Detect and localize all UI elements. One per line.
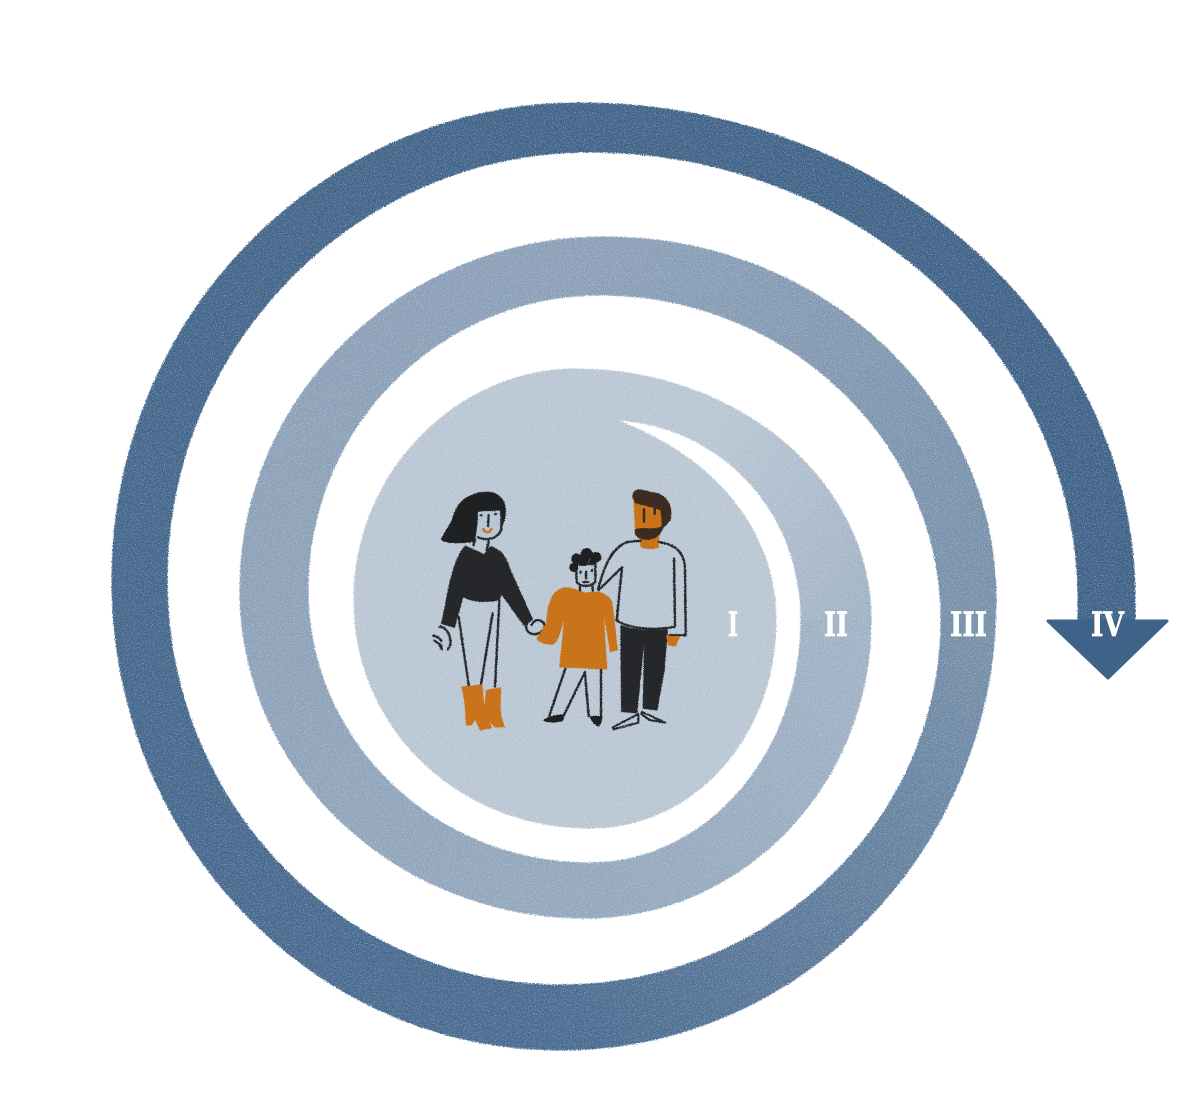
woman — [433, 492, 545, 731]
child legs — [549, 669, 601, 718]
man beard — [634, 525, 663, 540]
child hair — [569, 548, 601, 572]
man trousers — [620, 625, 668, 713]
woman smile — [483, 529, 491, 532]
man hand — [666, 636, 680, 647]
man — [598, 489, 686, 729]
man face — [633, 501, 662, 529]
man sweater — [598, 541, 686, 635]
child head — [576, 563, 595, 586]
label I: I — [728, 605, 738, 645]
stage II band, first turn — [240, 369, 871, 918]
clasped hands — [526, 619, 545, 634]
child — [537, 548, 618, 727]
child shoes — [543, 714, 602, 727]
man shoes — [613, 712, 665, 729]
man hair — [632, 489, 671, 530]
woman face — [477, 511, 501, 539]
label IV: IV — [1091, 605, 1124, 645]
woman hair — [441, 492, 506, 543]
woman blouse — [441, 545, 533, 628]
woman hand — [433, 627, 450, 649]
woman trousers — [459, 601, 499, 687]
stage IV band, outer turn — [112, 103, 1135, 1050]
man neck — [640, 537, 659, 549]
label II: II — [824, 605, 848, 645]
stage labels — [728, 605, 1124, 645]
label III: III — [950, 605, 987, 645]
spiral band — [112, 103, 1135, 1050]
stage III band, second turn — [240, 237, 996, 1050]
stage I central blob — [354, 369, 776, 828]
family illustration — [433, 489, 686, 731]
woman boots — [461, 684, 492, 731]
arrowhead — [1048, 621, 1167, 678]
child dress — [537, 587, 618, 670]
